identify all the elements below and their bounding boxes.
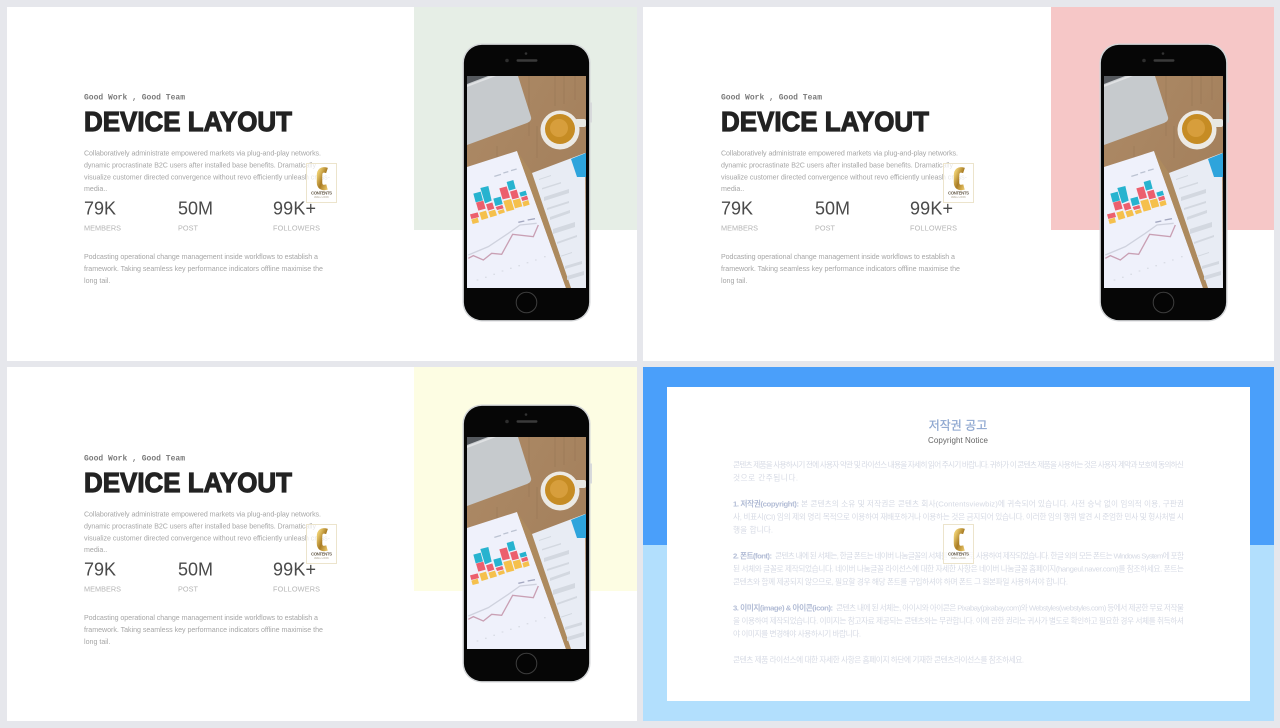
intro paragraph: visualize customer directed convergence without revo efficiently unleash cross- (84, 174, 331, 182)
intro paragraph: media.. (84, 546, 107, 554)
intro paragraph: dynamic procrastinate B2C users after installed base benefits. Dramatically (84, 522, 316, 530)
closing paragraph: framework. Taking seamless key performance indicators offline maximise the (84, 626, 323, 634)
panel: device layout yellow (7, 367, 637, 721)
stat: post: POST (178, 584, 199, 594)
logo watermark: WALL LOOK (314, 556, 329, 560)
notice intro: 콘텐츠 제품을 사용하시기 전에 사용자 약관 및 라이선스 내용을 자세히 읽어 주시기 바랍니다. 귀하가 이 콘텐츠 제품을 사용하는 것은 사용자 계약과 보호에 동의하신 (733, 460, 1184, 470)
stat: followers: 99K+ (273, 560, 316, 580)
intro paragraph: dynamic procrastinate B2C users after installed base benefits. Dramatically (84, 162, 316, 170)
stat: post: 50M (815, 198, 850, 218)
notice section 2: 된 서체와 글꼴로 제작되었습니다. 네이버 나눔글꼴 라이선스에 대한 자세한 사항은 네이버 나눔글꼴 홈페이지(hangeul.naver.com)를 참조하세요. 폰트는 (733, 564, 1184, 574)
closing paragraph: long tail. (84, 277, 110, 285)
logo watermark: CONTENTS (948, 552, 969, 556)
phone mockup (1100, 44, 1229, 322)
stat: followers (910, 198, 957, 232)
stat: post (178, 198, 213, 232)
intro paragraph: Collaboratively administrate empowered markets via plug-and-play networks. (84, 510, 321, 518)
logo watermark: CONTENTS (311, 552, 332, 556)
notice section 2: 콘텐츠 내에 된 서체는, 한글 폰트는 네이버 나눔글꼴의 서체를 기본으로 사용하여 제작되었습니다. 한글 외의 모든 폰트는 Windows System에 포함 (775, 550, 1184, 560)
stat: post: POST (178, 224, 199, 232)
notice card (667, 387, 1250, 701)
intro paragraph (721, 150, 968, 193)
notice subtitle: Copyright Notice (928, 436, 989, 445)
notice section 1: 본 콘텐츠의 소유 및 저작권은 콘텐츠 회사(Contentsviewbiz)에 귀속되어 있습니다. 사전 승낙 없이 임의적 이용, 구판권 (801, 498, 1184, 508)
title: DEVICE LAYOUT (84, 106, 292, 137)
closing paragraph: long tail. (84, 638, 110, 646)
stat: post: 50M (178, 560, 213, 580)
heading kicker: Good Work , Good Team (84, 94, 185, 102)
logo watermark: WALL LOOK (951, 556, 966, 560)
stat: members: 79K (84, 198, 116, 218)
yellow colour block (414, 367, 637, 591)
closing paragraph (84, 253, 323, 285)
stat: members: MEMBERS (84, 224, 121, 232)
phone mockup (462, 44, 592, 322)
notice section 2 (733, 550, 1184, 586)
closing paragraph: Podcasting operational change management inside workflows to establish a (84, 614, 318, 622)
notice section 3 (733, 602, 1184, 638)
stat: members: MEMBERS (84, 584, 121, 594)
stat: followers (273, 560, 320, 594)
logo watermark: CONTENTS (948, 190, 969, 196)
heading kicker: Good Work , Good Team (84, 454, 185, 464)
stat: members: 79K (721, 198, 753, 218)
notice section 1 (733, 498, 1184, 534)
notice section 1: 1. 저작권(copyright): (733, 498, 799, 508)
stat: post: 50M (178, 198, 213, 218)
stat: members (84, 560, 121, 594)
stat: members: MEMBERS (721, 224, 758, 232)
closing paragraph (721, 253, 960, 285)
panel: device layout pink (643, 7, 1274, 361)
stat: members (721, 198, 758, 232)
closing paragraph: long tail. (721, 277, 747, 285)
closing paragraph: Podcasting operational change management inside workflows to establish a (721, 253, 955, 261)
closing paragraph: framework. Taking seamless key performance indicators offline maximise the (84, 265, 323, 273)
intro paragraph: media.. (721, 185, 744, 193)
stat: followers: FOLLOWERS (910, 224, 957, 232)
notice section 2: 2. 폰트(font): (733, 552, 772, 560)
intro paragraph: dynamic procrastinate B2C users after installed base benefits. Dramatically (721, 162, 953, 170)
stat: followers (273, 198, 320, 232)
closing paragraph: Podcasting operational change management inside workflows to establish a (84, 253, 318, 261)
logo watermark (306, 524, 336, 564)
title: DEVICE LAYOUT (721, 106, 929, 137)
stat: post (178, 560, 213, 594)
panel: device layout green (7, 7, 637, 361)
intro paragraph (84, 150, 331, 193)
logo watermark: CONTENTS (311, 190, 332, 196)
stat: members: 79K (84, 560, 116, 580)
intro paragraph: visualize customer directed convergence without revo efficiently unleash cross- (84, 534, 331, 542)
title: DEVICE LAYOUT (84, 467, 292, 498)
notice intro (733, 460, 1184, 482)
intro paragraph: Collaboratively administrate empowered markets via plug-and-play networks. (721, 150, 958, 158)
intro paragraph: visualize customer directed convergence without revo efficiently unleash cross- (721, 174, 968, 182)
stat: followers: FOLLOWERS (273, 224, 320, 232)
closing paragraph (84, 614, 323, 646)
stat: members (84, 198, 121, 232)
green colour block (414, 7, 637, 230)
logo watermark (944, 164, 974, 202)
notice intro: 것으로 간주됩니다. (733, 472, 798, 482)
intro paragraph: media.. (84, 185, 107, 193)
phone mockup (462, 404, 592, 682)
notice section 1: 행을 합니다. (733, 524, 773, 534)
notice section 3: 3. 이미지(image) & 아이콘(icon): (733, 602, 833, 612)
stat: followers: 99K+ (273, 198, 316, 218)
notice section 1: 사, 비표시(CI) 임의 제외 영리 목적으로 이용하여 재배포하거나 이용하는 것은 금지되어 있습니다. 이러한 임의 행위 발견 시 준엄한 민사 및 형사처벌 시 (733, 512, 1184, 522)
panel: copyright notice (643, 367, 1274, 721)
notice title: 저작권 공고 (929, 418, 987, 432)
notice section 3: 을 이용하여 제작되었습니다. 이미지는 참고자료 제공되는 콘텐츠와는 무관합니다. 이에 관한 권리는 귀사가 별도로 확인하고 필요한 경우 서체를 취득하셔 (733, 616, 1184, 626)
stat: followers: FOLLOWERS (273, 584, 320, 594)
logo watermark (306, 164, 336, 202)
logo watermark (944, 524, 974, 564)
intro paragraph (84, 510, 331, 554)
stat: followers: 99K+ (910, 198, 953, 218)
notice section 3: 야 이미지를 변경해야 사용하시기 바랍니다. (733, 628, 861, 638)
heading kicker: Good Work , Good Team (721, 94, 822, 102)
stat: post: POST (815, 224, 836, 232)
logo watermark: WALL LOOK (314, 195, 329, 199)
notice section 2: 콘텐츠와 함께 제공되지 않으므로, 필요할 경우 해당 폰트를 구입하셔야 하며 폰트 그 원본파일 사용하셔야 합니다. (733, 576, 1068, 586)
logo watermark: WALL LOOK (951, 195, 966, 199)
closing paragraph: framework. Taking seamless key performance indicators offline maximise the (721, 265, 960, 273)
stat: post (815, 198, 850, 232)
intro paragraph: Collaboratively administrate empowered markets via plug-and-play networks. (84, 150, 321, 158)
pink colour block (1051, 7, 1274, 230)
notice footer: 콘텐츠 제품 라이선스에 대한 자세한 사항은 홈페이지 하단에 기재한 콘텐츠라이선스를 참조하세요. (733, 654, 1024, 664)
notice section 3: 콘텐츠 내에 된 서체는, 아이시와 아이콘은 Pixabay(pixabay.com)와 Webstyles(webstyles.com) 등에서 제공한 무료 저작물 (836, 602, 1184, 612)
